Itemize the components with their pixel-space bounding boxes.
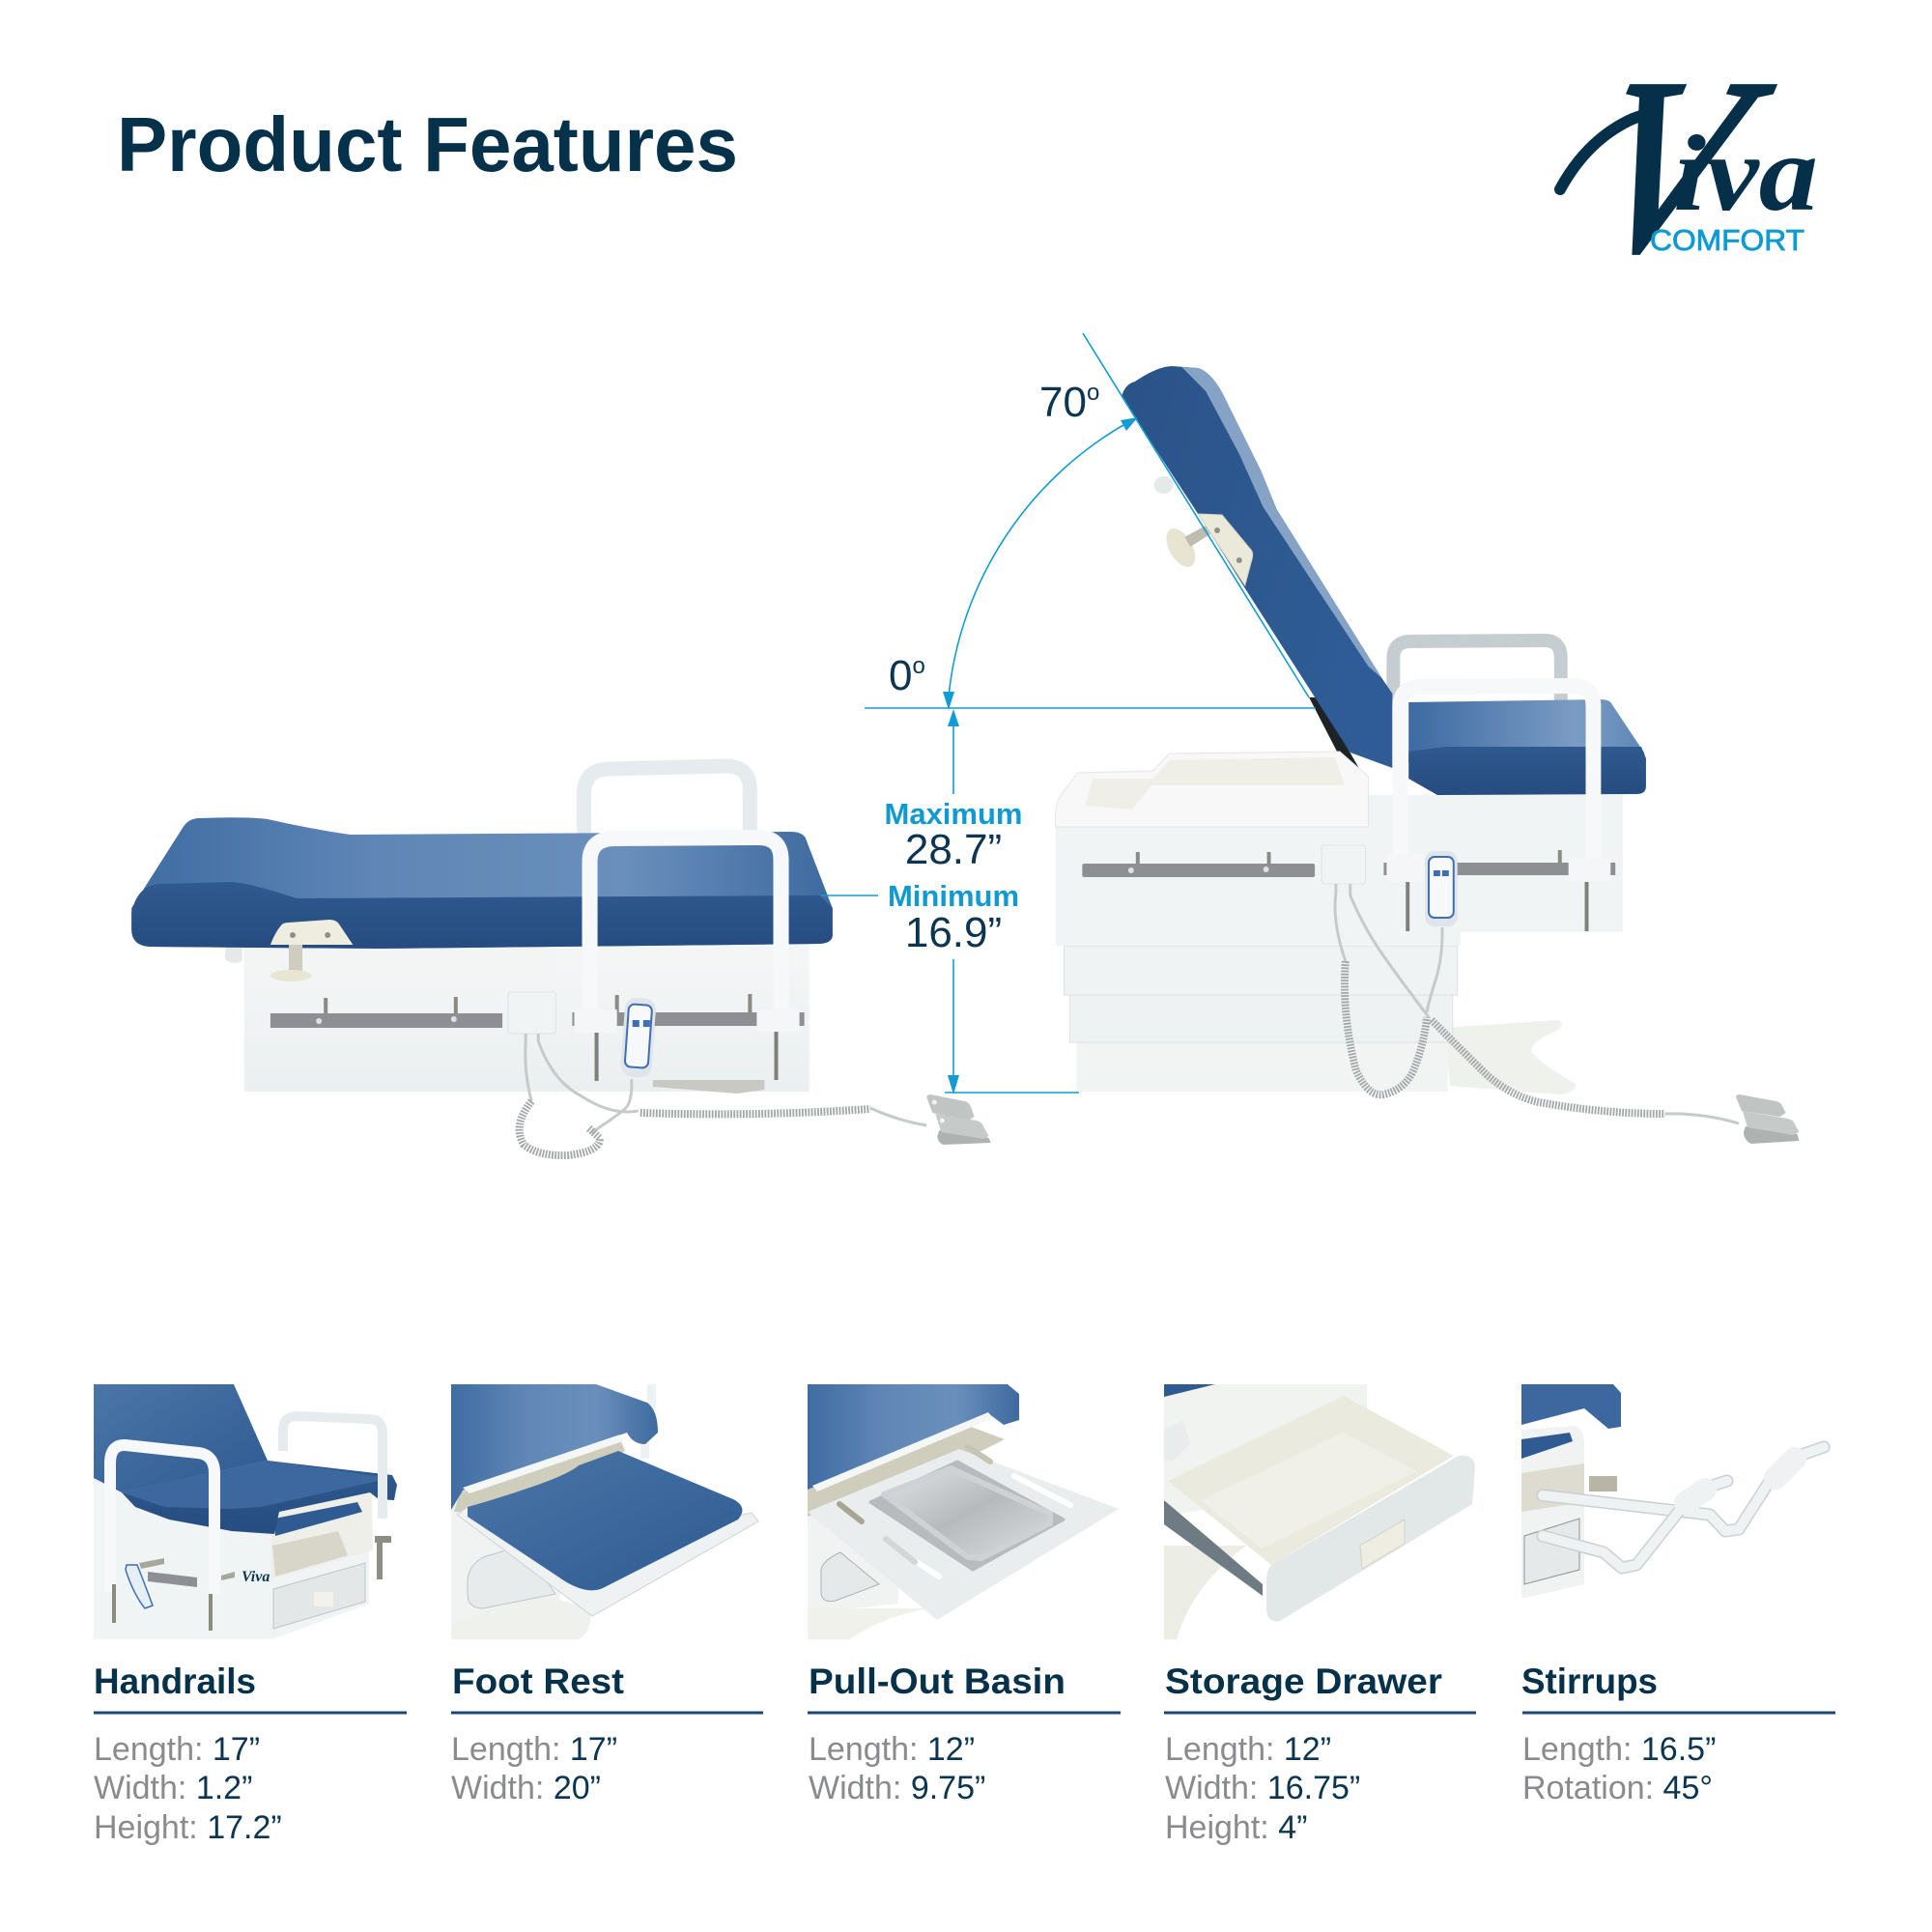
pendant face xyxy=(625,1004,652,1068)
clamps xyxy=(114,1584,211,1631)
basin specs xyxy=(809,1731,985,1806)
lower stirrup xyxy=(1543,1481,1727,1568)
incline arc xyxy=(949,421,1130,696)
pedal base raised xyxy=(1744,1126,1799,1144)
backrest cushion xyxy=(1122,366,1392,768)
foot rest bracket xyxy=(270,920,353,981)
handrails photo xyxy=(94,1384,397,1639)
0 degree label: 0 xyxy=(889,652,912,699)
mechanism block xyxy=(272,1531,348,1577)
foot rest specs xyxy=(451,1731,617,1806)
blue pad xyxy=(451,1384,658,1510)
side rail left raised xyxy=(1082,864,1315,877)
zero degree line xyxy=(865,707,1316,709)
mattress xyxy=(131,817,833,949)
drawer floor xyxy=(1201,1433,1416,1548)
blue pad xyxy=(808,1384,1019,1490)
pedal base xyxy=(937,1130,991,1145)
drawer xyxy=(273,1563,365,1629)
bracket screws xyxy=(290,932,330,938)
length: Length: 17” xyxy=(94,1731,260,1768)
basin photo xyxy=(808,1384,1119,1639)
drawer xyxy=(1524,1519,1579,1584)
drawer front xyxy=(1266,1456,1475,1621)
base foot xyxy=(1445,1020,1577,1094)
dimension annotations xyxy=(821,333,1316,1094)
rear handrail raised xyxy=(1393,640,1561,705)
0 degree label: o xyxy=(912,653,925,679)
pedal lower raised xyxy=(1743,1111,1799,1135)
panel: foot rest xyxy=(451,1384,763,1806)
bracket tab xyxy=(1589,1476,1617,1492)
upper stirrup paddle xyxy=(1776,1459,1795,1478)
suction cup xyxy=(270,970,311,981)
pendant buttons xyxy=(633,1020,650,1027)
bracket screws raised xyxy=(1214,527,1242,563)
seat dark xyxy=(122,1461,397,1534)
lower foot xyxy=(808,1608,927,1639)
pedal lower xyxy=(935,1114,989,1139)
coiled cord lower xyxy=(520,1101,600,1155)
mattress front face xyxy=(131,882,833,949)
white strip xyxy=(812,1412,993,1492)
slots xyxy=(839,1447,1070,1577)
mattress whole xyxy=(131,817,833,949)
base upper block xyxy=(1056,795,1623,946)
hand pendant xyxy=(620,997,657,1078)
minimum lead line xyxy=(821,895,878,896)
handrails rule xyxy=(94,1712,407,1714)
head stop knob xyxy=(225,947,242,963)
pedal icons xyxy=(932,1099,945,1122)
hand pendant raised xyxy=(1425,851,1458,926)
width: Width: 9.75” xyxy=(809,1770,985,1806)
front handrail xyxy=(590,838,781,1014)
lower pad xyxy=(1521,1433,1573,1459)
foot rest rule xyxy=(451,1712,763,1714)
drawer handle xyxy=(314,1592,333,1606)
foot rest photo xyxy=(451,1384,758,1639)
under seat mechanism xyxy=(270,1492,373,1579)
side rail right raised xyxy=(1383,863,1615,875)
rail screws xyxy=(316,1016,457,1024)
side rail left xyxy=(270,1013,502,1028)
arc arrowheads xyxy=(943,417,1138,710)
rear rail xyxy=(283,1416,383,1519)
mini logo: Viva xyxy=(242,1569,270,1585)
drawer specs xyxy=(1165,1731,1360,1846)
backrest xyxy=(94,1384,268,1492)
side bar xyxy=(148,1572,197,1587)
width: Width: 20” xyxy=(451,1770,601,1806)
drawer rule xyxy=(1164,1712,1476,1714)
table base xyxy=(244,937,810,1092)
upper base panel xyxy=(244,947,555,976)
cushion xyxy=(468,1451,742,1590)
foot pedal raised xyxy=(1736,1094,1799,1144)
rotation: Rotation: 45° xyxy=(1522,1770,1713,1806)
pendant face raised xyxy=(1429,857,1454,918)
logo: Viva Comfort xyxy=(1560,27,1818,303)
panel: handrails xyxy=(94,1384,407,1846)
logo script wordmark: V xyxy=(1564,27,1790,303)
rail brackets xyxy=(574,1009,800,1033)
stirrup bracket raised xyxy=(1154,476,1253,585)
beige frame xyxy=(454,1439,625,1512)
basin inner xyxy=(884,1468,1050,1558)
base foot xyxy=(560,1600,591,1639)
foot rest heading: Foot Rest xyxy=(452,1662,624,1701)
height line upper xyxy=(952,717,954,794)
pendant body raised xyxy=(1425,851,1458,926)
cables raised xyxy=(1335,884,1739,1123)
70 degree label: o xyxy=(1087,380,1099,406)
lower clamps xyxy=(597,1032,777,1081)
plate xyxy=(808,1449,1119,1620)
panel: pull-out basin xyxy=(808,1384,1121,1806)
length: Length: 12” xyxy=(809,1731,975,1768)
lower stirrup arm xyxy=(1543,1481,1727,1568)
upper stirrup xyxy=(1543,1447,1824,1531)
height: Height: 17.2” xyxy=(94,1809,282,1846)
basin heading: Pull-Out Basin xyxy=(809,1662,1065,1701)
stirrups specs xyxy=(1522,1731,1716,1806)
basin rule xyxy=(808,1712,1121,1714)
panel: stirrups xyxy=(1521,1384,1835,1806)
raised exam table xyxy=(1056,366,1799,1144)
maximum value: 28.7” xyxy=(905,826,1002,873)
foot plate xyxy=(653,1080,764,1094)
tray rim xyxy=(1056,752,1369,827)
rail brackets raised xyxy=(1386,854,1610,882)
mechanism recess xyxy=(1521,1463,1584,1512)
beige frame xyxy=(808,1425,1005,1517)
storage tray xyxy=(1056,752,1369,827)
baseline to raised table xyxy=(945,1092,1079,1094)
base xyxy=(451,1490,560,1623)
inner knob xyxy=(1164,1420,1190,1461)
rear clamp xyxy=(375,1536,391,1579)
pedal upper raised xyxy=(1736,1094,1786,1117)
pedal upper xyxy=(926,1094,975,1121)
seat xyxy=(1408,699,1646,795)
lower stirrup arm outline xyxy=(1543,1481,1727,1568)
control box raised xyxy=(1321,845,1366,884)
side rail posts xyxy=(326,994,750,1014)
coiled cord raised lower xyxy=(1345,961,1427,1094)
side stub rear xyxy=(221,1572,235,1580)
mini pendant xyxy=(126,1565,153,1608)
flat exam table xyxy=(131,766,991,1155)
handrails specs xyxy=(94,1731,282,1846)
base tier 3 xyxy=(1076,1042,1448,1092)
height: Height: 4” xyxy=(1165,1809,1307,1846)
handrails heading: Handrails xyxy=(94,1662,256,1701)
logo script wordmark: iva xyxy=(1673,114,1818,234)
blue pad xyxy=(1521,1384,1621,1429)
drawer heading: Storage Drawer xyxy=(1165,1662,1442,1701)
width: Width: 16.75” xyxy=(1165,1770,1360,1806)
70 degree label: 70 xyxy=(1039,379,1087,426)
seat top xyxy=(122,1461,391,1509)
width: Width: 1.2” xyxy=(94,1770,252,1806)
panel: storage drawer xyxy=(1164,1384,1476,1846)
logo swash xyxy=(1560,114,1654,189)
base tier 2 xyxy=(1069,995,1453,1042)
backrest highlight edge xyxy=(1181,367,1381,678)
side stub front xyxy=(139,1558,164,1569)
drawer behind xyxy=(821,1552,879,1602)
cables xyxy=(526,1034,926,1133)
upper stirrup arm xyxy=(1543,1447,1824,1531)
length: Length: 16.5” xyxy=(1522,1731,1716,1768)
base tier 1 xyxy=(1065,946,1458,995)
length: Length: 12” xyxy=(1165,1731,1331,1768)
lower seat xyxy=(274,1502,362,1536)
incline reference line xyxy=(1083,333,1309,697)
side rail right xyxy=(572,1012,805,1026)
tray inner xyxy=(1085,757,1345,810)
backrest xyxy=(1122,366,1392,768)
seat front xyxy=(1408,747,1646,795)
bracket plate xyxy=(270,920,353,945)
bracket knob xyxy=(1154,476,1173,494)
stirrups heading: Stirrups xyxy=(1521,1662,1658,1701)
support pole xyxy=(640,1384,656,1459)
stirrups rule xyxy=(1522,1712,1835,1714)
length: Length: 17” xyxy=(451,1731,617,1768)
rear handrail xyxy=(584,766,750,837)
blue corner xyxy=(1164,1384,1215,1397)
logo subtitle: COMFORT xyxy=(1650,223,1804,257)
base body xyxy=(94,1478,369,1639)
height arrow lower xyxy=(948,1075,959,1094)
upper stirrup arm outline xyxy=(1543,1447,1824,1531)
drawer rail xyxy=(1164,1500,1263,1596)
title: Product Features xyxy=(117,101,738,187)
black support strut xyxy=(1309,697,1359,768)
base foot xyxy=(1164,1546,1246,1639)
white strip xyxy=(463,1435,623,1493)
drawer walls xyxy=(1168,1396,1454,1565)
bracket stem xyxy=(289,945,302,974)
maximum label: Maximum xyxy=(885,797,1022,831)
minimum label: Minimum xyxy=(888,879,1019,913)
basin rim xyxy=(870,1462,1064,1570)
minimum value: 16.9” xyxy=(905,909,1002,956)
coiled cord long xyxy=(640,1109,870,1114)
foot pedal xyxy=(926,1094,991,1145)
pendant buttons raised xyxy=(1434,870,1449,876)
control box xyxy=(508,992,555,1034)
height arrow upper xyxy=(948,709,959,726)
base xyxy=(808,1515,898,1608)
rail screws raised xyxy=(1128,867,1269,873)
seat top xyxy=(1408,699,1646,763)
bracket stem raised xyxy=(1184,526,1211,547)
white plate xyxy=(457,1507,758,1616)
coiled cord raised long xyxy=(1432,1020,1665,1114)
bracket plate raised xyxy=(1198,514,1253,585)
lower stirrup paddle xyxy=(1686,1490,1705,1503)
drawer photo xyxy=(1164,1384,1475,1639)
lower clamps raised xyxy=(1407,882,1586,931)
suction cup raised xyxy=(1160,524,1202,572)
front handrail raised xyxy=(1400,686,1593,869)
front rail xyxy=(104,1439,220,1529)
drawer xyxy=(468,1546,555,1608)
cabinet front xyxy=(1164,1384,1367,1517)
base body xyxy=(1521,1426,1584,1599)
pendant body xyxy=(620,997,657,1078)
side rails raised xyxy=(1138,850,1560,864)
drawer handle xyxy=(1360,1520,1405,1569)
stirrups photo xyxy=(1521,1384,1824,1599)
height line lower xyxy=(952,959,954,1077)
